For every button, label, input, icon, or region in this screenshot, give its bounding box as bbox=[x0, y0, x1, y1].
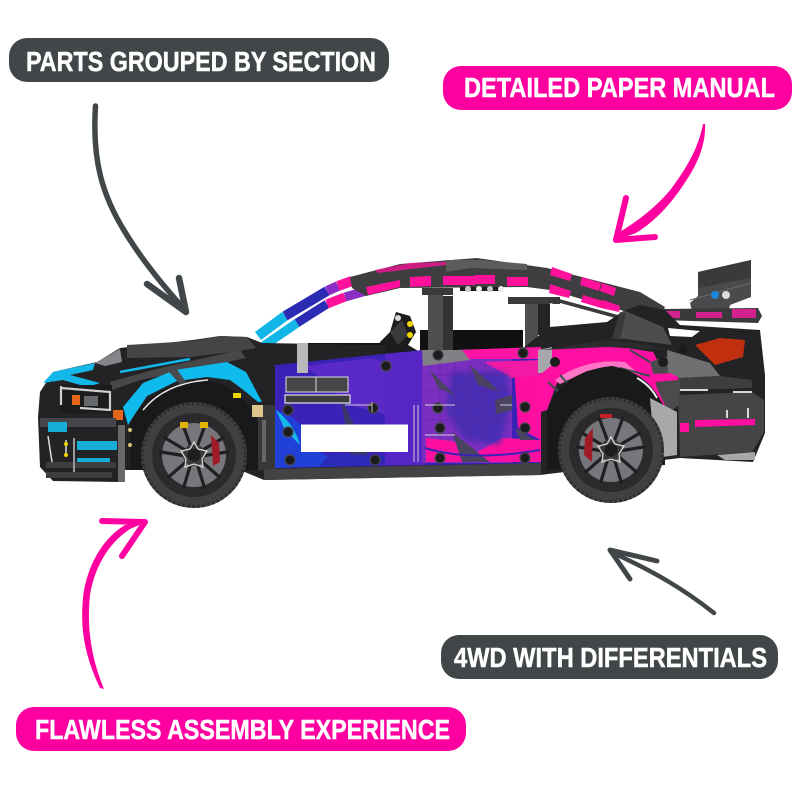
rear quarter panel bbox=[538, 340, 680, 412]
label: parts grouped by section bbox=[9, 38, 389, 82]
headlight bbox=[60, 385, 123, 420]
body silhouette bbox=[38, 305, 765, 482]
taillight bbox=[695, 338, 745, 365]
front wheel bbox=[141, 402, 247, 508]
hood bbox=[43, 336, 256, 390]
arrow: assembly to front wheel bbox=[82, 521, 146, 689]
door panel bbox=[275, 343, 541, 468]
roof tubes bbox=[350, 258, 665, 318]
door vents bbox=[285, 343, 350, 403]
roof and pillars bbox=[252, 258, 665, 366]
label: detailed paper manual bbox=[443, 66, 792, 110]
pillar between arch and door bbox=[233, 393, 275, 470]
label: flawless assembly experience bbox=[16, 707, 466, 751]
label: flawless assembly experience: FLAWLESS ASSEMBLY EXPERIENCE bbox=[35, 714, 450, 745]
interior bbox=[307, 330, 523, 365]
arrow: manual to roof bbox=[614, 124, 705, 241]
bumper panels bbox=[40, 418, 132, 482]
label: 4wd with differentials bbox=[441, 635, 778, 679]
front fender cyan bbox=[123, 362, 262, 425]
rear brake caliper bbox=[584, 428, 593, 462]
white gap under the spoiler bbox=[668, 328, 700, 337]
label: parts grouped by section: PARTS GROUPED BY SECTION bbox=[26, 46, 376, 77]
wing bbox=[660, 260, 762, 323]
rear body bbox=[550, 310, 764, 460]
A-pillar upper tube bbox=[258, 281, 352, 336]
seat bbox=[376, 312, 420, 366]
car bbox=[38, 258, 765, 508]
front arch bbox=[130, 380, 258, 470]
door pillars bbox=[422, 286, 622, 352]
white door plate bbox=[301, 424, 408, 452]
rear wheel bbox=[558, 397, 664, 503]
A-pillar lower tube bbox=[252, 291, 366, 352]
side sill bbox=[264, 463, 541, 480]
arrow: parts to car hood bbox=[95, 106, 186, 312]
arrow: 4wd to rear wheel bbox=[610, 550, 714, 613]
door rivets bbox=[283, 348, 530, 465]
front brake caliper bbox=[211, 435, 220, 466]
front fascia bbox=[40, 385, 132, 482]
rear arch and bumper side bbox=[547, 366, 677, 470]
